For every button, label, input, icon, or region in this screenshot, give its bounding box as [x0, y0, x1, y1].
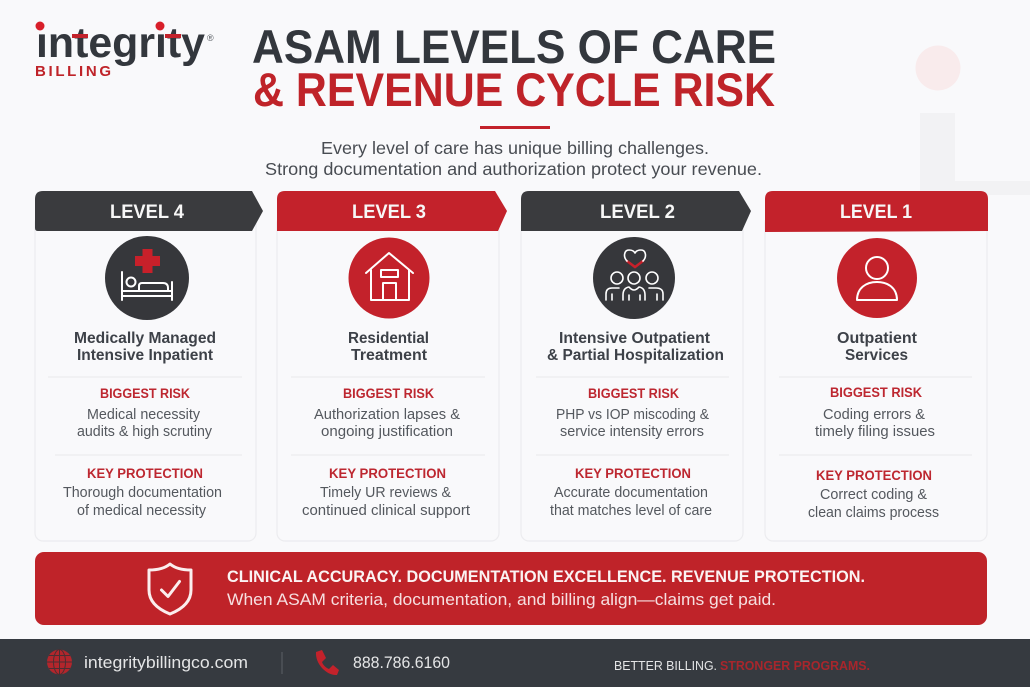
- key protection: level 4: KEY PROTECTION: [87, 466, 203, 481]
- key protection: level 3: KEY PROTECTION: [329, 466, 446, 481]
- key protection: level 4: [63, 466, 222, 519]
- level 3 banner: LEVEL 3: [352, 202, 426, 223]
- panel: Level 3: [277, 191, 507, 541]
- callout text: CLINICAL ACCURACY. DOCUMENTATION EXCELLENCE. REVENUE PROTECTION.: [227, 568, 865, 586]
- key protection: level 2: Accurate documentation: [554, 485, 708, 501]
- panel: Level 4: [35, 191, 263, 541]
- heading: level 3: Residential: [348, 330, 429, 347]
- heading: level 3: [348, 330, 429, 364]
- heading: level 2: [547, 330, 724, 364]
- level 2 banner: [521, 191, 751, 231]
- level 3 banner: [277, 191, 507, 231]
- level 2 banner: LEVEL 2: [600, 202, 675, 223]
- heading: level 2: & Partial Hospitalization: [547, 347, 724, 364]
- biggest risk: level 4: [77, 386, 213, 440]
- biggest risk: level 4: BIGGEST RISK: [100, 386, 190, 401]
- biggest risk: level 1: timely filing issues: [815, 424, 935, 440]
- biggest risk: level 2: BIGGEST RISK: [588, 386, 679, 401]
- biggest risk: level 1: Coding errors &: [823, 407, 925, 423]
- key protection: level 1: [808, 468, 939, 521]
- icon: hospital bed with red cross: [105, 236, 189, 320]
- subtitle: [265, 138, 762, 179]
- logo: Integrity Billing: ®: [207, 33, 214, 43]
- footer: [0, 639, 1030, 687]
- biggest risk: level 1: [815, 385, 935, 440]
- title: ASAM LEVELS OF CARE: [252, 20, 776, 73]
- icon: phone: [316, 650, 339, 675]
- key protection: level 2: that matches level of care: [550, 503, 712, 519]
- biggest risk: level 2: PHP vs IOP miscoding &: [556, 407, 709, 423]
- key protection: level 2: KEY PROTECTION: [575, 466, 691, 481]
- level 4 banner: [35, 191, 263, 231]
- title: & REVENUE CYCLE RISK: [253, 63, 775, 116]
- heading: level 1: Outpatient: [837, 330, 917, 347]
- heading: level 3: Treatment: [351, 347, 427, 364]
- callout text: [227, 568, 865, 609]
- icon: house: [348, 238, 430, 318]
- key protection: level 4: Thorough documentation: [63, 485, 222, 501]
- heading: level 4: [74, 330, 216, 364]
- heading: level 4: Medically Managed: [74, 330, 216, 347]
- subtitle: Every level of care has unique billing challenges.: [321, 138, 709, 158]
- heading: level 1: Services: [845, 347, 908, 364]
- heading: level 2: Intensive Outpatient: [559, 330, 710, 347]
- level 4 banner: LEVEL 4: [110, 202, 184, 223]
- key protection: level 3: Timely UR reviews &: [320, 485, 451, 501]
- icon: globe: [47, 650, 72, 674]
- icon: group with heart: [593, 237, 675, 319]
- biggest risk: level 3: BIGGEST RISK: [343, 386, 434, 401]
- footer tagline: STRONGER PROGRAMS.: [720, 659, 870, 673]
- key protection: level 1: clean claims process: [808, 505, 939, 521]
- panel: Level 2: [521, 191, 751, 541]
- key protection: level 2: [550, 466, 712, 519]
- icon: shield with check: [149, 564, 191, 614]
- biggest risk: level 1: BIGGEST RISK: [830, 385, 922, 400]
- biggest risk: level 4: Medical necessity: [87, 407, 201, 423]
- website: integritybillingco.com: [84, 654, 248, 672]
- title: [252, 20, 776, 116]
- key protection: level 3: [302, 466, 470, 519]
- logo: Integrity Billing: integrity: [36, 19, 205, 67]
- key protection: level 3: continued clinical support: [302, 503, 470, 519]
- logo: Integrity Billing: BILLING: [35, 63, 111, 80]
- biggest risk: level 3: ongoing justification: [321, 424, 453, 440]
- biggest risk: level 4: audits & high scrutiny: [77, 424, 213, 440]
- phone number: 888.786.6160: [353, 654, 450, 672]
- icon: person: [837, 238, 917, 318]
- panel: Level 1: [765, 191, 988, 541]
- key protection: level 1: KEY PROTECTION: [816, 468, 932, 483]
- key protection: level 1: Correct coding &: [820, 487, 927, 503]
- footer tagline: BETTER BILLING.: [614, 659, 717, 673]
- biggest risk: level 2: [556, 386, 709, 440]
- heading: level 1: [837, 330, 917, 364]
- level 1 banner: LEVEL 1: [840, 202, 912, 223]
- callout text: When ASAM criteria, documentation, and billing align—claims get paid.: [227, 590, 776, 609]
- footer tagline: [614, 659, 870, 673]
- biggest risk: level 3: [314, 386, 460, 440]
- biggest risk: level 3: Authorization lapses &: [314, 407, 460, 423]
- callout banner: [35, 552, 987, 625]
- title underline accent: [480, 126, 550, 129]
- subtitle: Strong documentation and authorization protect your revenue.: [265, 159, 762, 179]
- heading: level 4: Intensive Inpatient: [77, 347, 213, 364]
- biggest risk: level 2: service intensity errors: [560, 424, 704, 440]
- level 1 banner: [765, 191, 988, 232]
- key protection: level 4: of medical necessity: [77, 503, 207, 519]
